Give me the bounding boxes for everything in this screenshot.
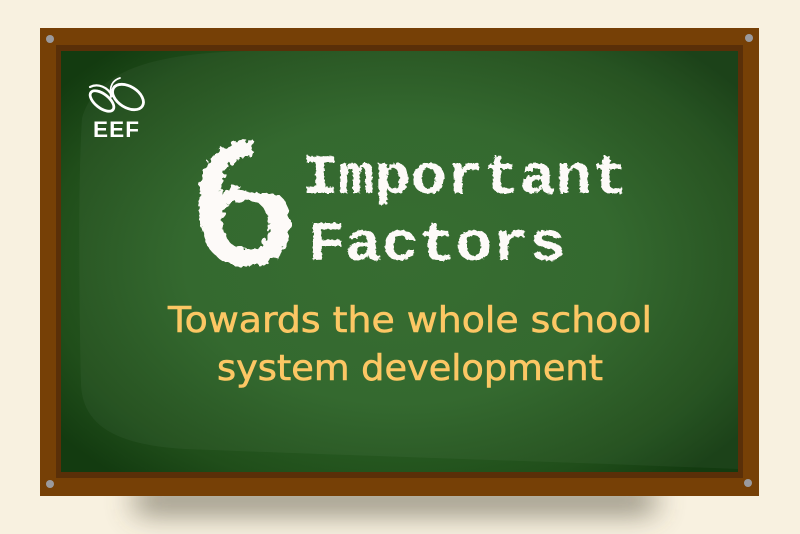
- logo wordmark: EEF: [93, 117, 139, 142]
- wooden frame: [40, 28, 759, 496]
- subtitle line 1: Towards the whole school: [167, 300, 652, 341]
- subtitle: [167, 300, 652, 389]
- EEF logo: [87, 78, 148, 142]
- title: Important Factors: [302, 146, 628, 277]
- big chalk number: 6: [192, 109, 296, 299]
- title line 1: Important: [302, 146, 628, 210]
- frame screws: [46, 34, 753, 488]
- cast shadow below the board: [135, 488, 655, 512]
- subtitle line 2: system development: [217, 348, 603, 389]
- chalkboard surface: [61, 51, 738, 472]
- title line 2: Factors: [308, 213, 566, 277]
- logo icon: apple outline: [87, 78, 148, 115]
